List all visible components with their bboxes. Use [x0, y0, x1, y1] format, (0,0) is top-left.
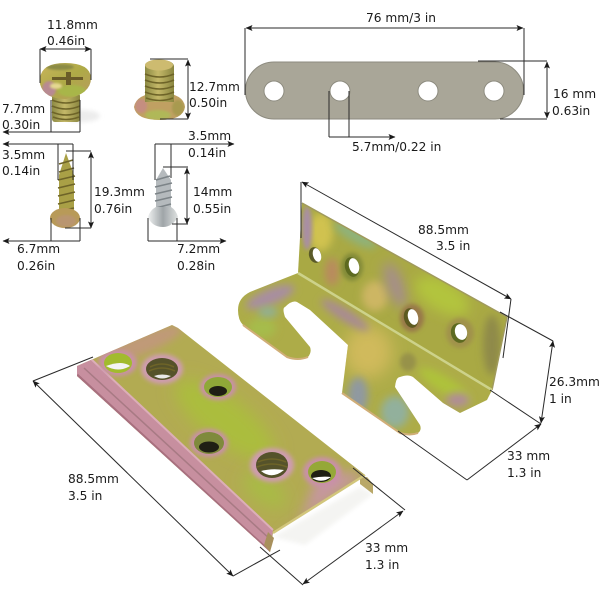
width dimension: [398, 424, 550, 480]
panel: flat channel plate: [33, 319, 408, 585]
far side tab: [360, 477, 373, 494]
thread diameter dimension: 3.5mm: [2, 148, 45, 162]
width dimension: 1.3 in: [365, 558, 399, 572]
panel: short silver wood screw: [148, 129, 234, 273]
length dimension: 3.5 in: [68, 489, 102, 503]
plate top face: [70, 319, 370, 555]
flange holes: [307, 246, 469, 345]
hole dimension: 5.7mm/0.22 in: [352, 140, 441, 154]
shank diameter dimension: 0.30in: [2, 118, 40, 132]
length dimension: 88.5mm: [418, 223, 469, 237]
length dimension: [301, 182, 511, 358]
panel: machine screw side view: [134, 59, 240, 120]
length dimension: 12.7mm: [189, 80, 240, 94]
bracket base plate: [238, 273, 492, 434]
length dimension: [150, 59, 240, 119]
height dimension: 1 in: [549, 392, 572, 406]
height dimension: [490, 312, 600, 424]
head diameter dimension: 0.46in: [47, 34, 85, 48]
head diameter dimension: [3, 218, 80, 273]
head diameter dimension: 0.28in: [177, 259, 215, 273]
near side tab: [264, 532, 274, 552]
panel: long wood screw: [2, 144, 145, 273]
width dimension: [478, 61, 596, 119]
width dimension: 1.3 in: [507, 466, 541, 480]
length dimension: 88.5mm: [68, 472, 119, 486]
screw illustration: [148, 168, 178, 227]
screw illustration: [134, 60, 185, 120]
length dimension: [65, 151, 145, 228]
width dimension: 16 mm: [553, 87, 596, 101]
length dimension: 19.3mm: [94, 185, 145, 199]
thread diameter dimension: 0.14in: [2, 164, 40, 178]
thread diameter dimension: [155, 129, 234, 180]
channel underside and shadow: [273, 487, 373, 545]
length dimension: [33, 357, 280, 576]
bracket rim: [243, 325, 418, 434]
width dimension: [260, 468, 408, 585]
channel front edge: [273, 475, 365, 533]
thread diameter dimension: [2, 144, 73, 180]
head diameter dimension: 11.8mm: [47, 18, 98, 32]
length dimension: [163, 167, 232, 224]
width dimension: 33 mm: [507, 449, 550, 463]
length dimension: 3.5 in: [436, 239, 470, 253]
plate body with four holes: [245, 62, 524, 119]
length dimension: 76 mm/3 in: [366, 11, 436, 25]
screw illustration: [40, 63, 100, 122]
thread diameter dimension: 3.5mm: [188, 129, 231, 143]
panel: top flat plate: [245, 11, 596, 154]
length dimension: 0.76in: [94, 202, 132, 216]
head diameter dimension: 0.26in: [17, 259, 55, 273]
length dimension: 0.55in: [193, 202, 231, 216]
flange edges: [302, 203, 507, 390]
shank diameter dimension: 7.7mm: [2, 102, 45, 116]
width dimension: 0.63in: [552, 104, 590, 118]
thread diameter dimension: 0.14in: [188, 146, 226, 160]
panel: machine screw top view: [2, 18, 100, 132]
bracket vertical flange: [298, 204, 506, 388]
shank diameter dimension: [2, 100, 80, 132]
width dimension: 33 mm: [365, 541, 408, 555]
height dimension: 26.3mm: [549, 375, 600, 389]
panel: angle hook bracket: [230, 182, 600, 480]
screw illustration: [50, 153, 80, 228]
bend line: [298, 273, 492, 390]
head diameter dimension: [40, 18, 98, 83]
head diameter dimension: [148, 218, 226, 273]
length dimension: [245, 11, 524, 95]
plate holes: [104, 353, 336, 483]
length dimension: 14mm: [193, 185, 232, 199]
head diameter dimension: 6.7mm: [17, 242, 60, 256]
length dimension: 0.50in: [189, 96, 227, 110]
head diameter dimension: 7.2mm: [177, 242, 220, 256]
hole dimension: [329, 91, 441, 154]
